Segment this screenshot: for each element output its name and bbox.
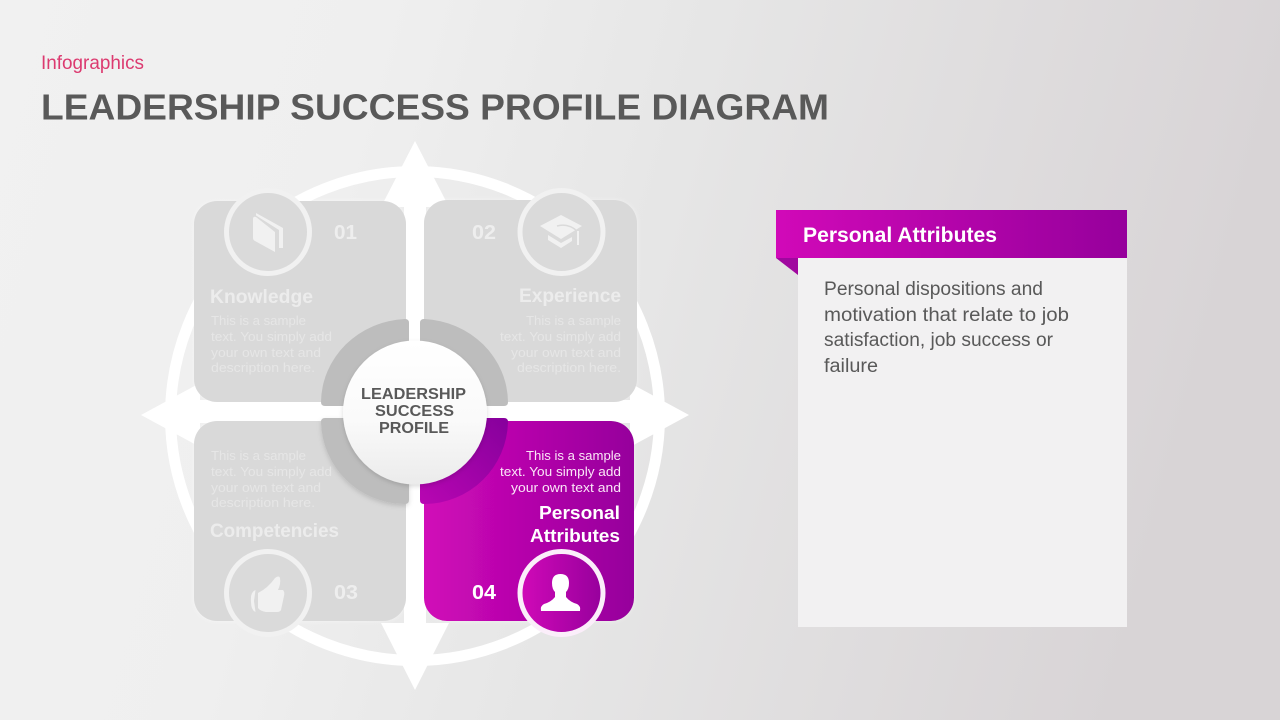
heading: experience: Experience xyxy=(519,286,621,307)
text block: knowledge xyxy=(211,313,332,375)
heading: personal attributes: Personal xyxy=(539,503,620,523)
diagram: white ring and four arrows xyxy=(141,141,689,690)
number 04: 04 xyxy=(472,582,497,604)
number 03: 03 xyxy=(334,582,358,604)
text block: experience: description here. xyxy=(517,360,621,375)
centre hub: circle and label: PROFILE xyxy=(379,420,449,437)
text block: experience: your own text and xyxy=(511,345,621,360)
number 02: 02 xyxy=(472,222,496,244)
text block: experience: text. You simply add xyxy=(500,329,621,344)
text block: knowledge: description here. xyxy=(211,360,315,375)
panel: personal attributes card xyxy=(424,421,634,621)
detail text: failure xyxy=(824,356,878,377)
heading: personal attributes xyxy=(530,503,620,546)
text block: competencies xyxy=(211,448,332,510)
icon: book xyxy=(226,190,310,274)
heading: personal attributes: Attributes xyxy=(530,526,620,546)
panel: knowledge card xyxy=(194,201,406,402)
text block: personal attributes: your own text and xyxy=(511,480,621,495)
detail text: motivation that relate to job xyxy=(824,305,1069,326)
text block: experience xyxy=(500,313,621,375)
icon: thumbs up xyxy=(226,552,310,634)
heading: knowledge: Knowledge xyxy=(210,287,313,308)
text block: personal attributes: This is a sample xyxy=(526,448,621,463)
arc: top right xyxy=(420,319,508,406)
panel: detail card xyxy=(776,210,1127,627)
text block: competencies: your own text and xyxy=(211,480,321,495)
icon: graduation cap xyxy=(520,190,603,274)
icon: person xyxy=(520,552,603,634)
text block: knowledge: text. You simply add xyxy=(211,329,332,344)
ribbon header xyxy=(776,210,1127,258)
detail text: Personal dispositions and xyxy=(824,279,1043,300)
text block: competencies: description here. xyxy=(211,495,315,510)
heading: competencies: Competencies xyxy=(210,521,339,542)
centre hub: circle and label: LEADERSHIP xyxy=(361,386,466,403)
ribbon fold xyxy=(776,258,798,275)
text block: experience: This is a sample xyxy=(526,313,621,328)
title: LEADERSHIP SUCCESS PROFILE DIAGRAM xyxy=(41,86,829,128)
centre hub: circle and label xyxy=(343,340,487,484)
text block: knowledge: your own text and xyxy=(211,345,321,360)
number 01: 01 xyxy=(334,222,357,244)
panel: competencies card xyxy=(194,421,406,621)
arc: top left xyxy=(321,319,409,406)
centre hub: segmented arcs xyxy=(321,319,508,504)
arc: bottom right xyxy=(420,418,508,504)
centre hub: circle and label: SUCCESS xyxy=(375,403,454,420)
text block: knowledge: This is a sample xyxy=(211,313,306,328)
detail text: satisfaction, job success or xyxy=(824,330,1054,351)
panel: experience card xyxy=(424,200,637,402)
text block: personal attributes: text. You simply add xyxy=(500,464,621,479)
arc: bottom left xyxy=(321,418,409,504)
ribbon heading: Personal Attributes xyxy=(803,224,997,247)
detail text xyxy=(824,279,1069,377)
text block: competencies: This is a sample xyxy=(211,448,306,463)
text block: personal attributes xyxy=(500,448,621,495)
section label: Infographics xyxy=(41,53,144,74)
text block: competencies: text. You simply add xyxy=(211,464,332,479)
